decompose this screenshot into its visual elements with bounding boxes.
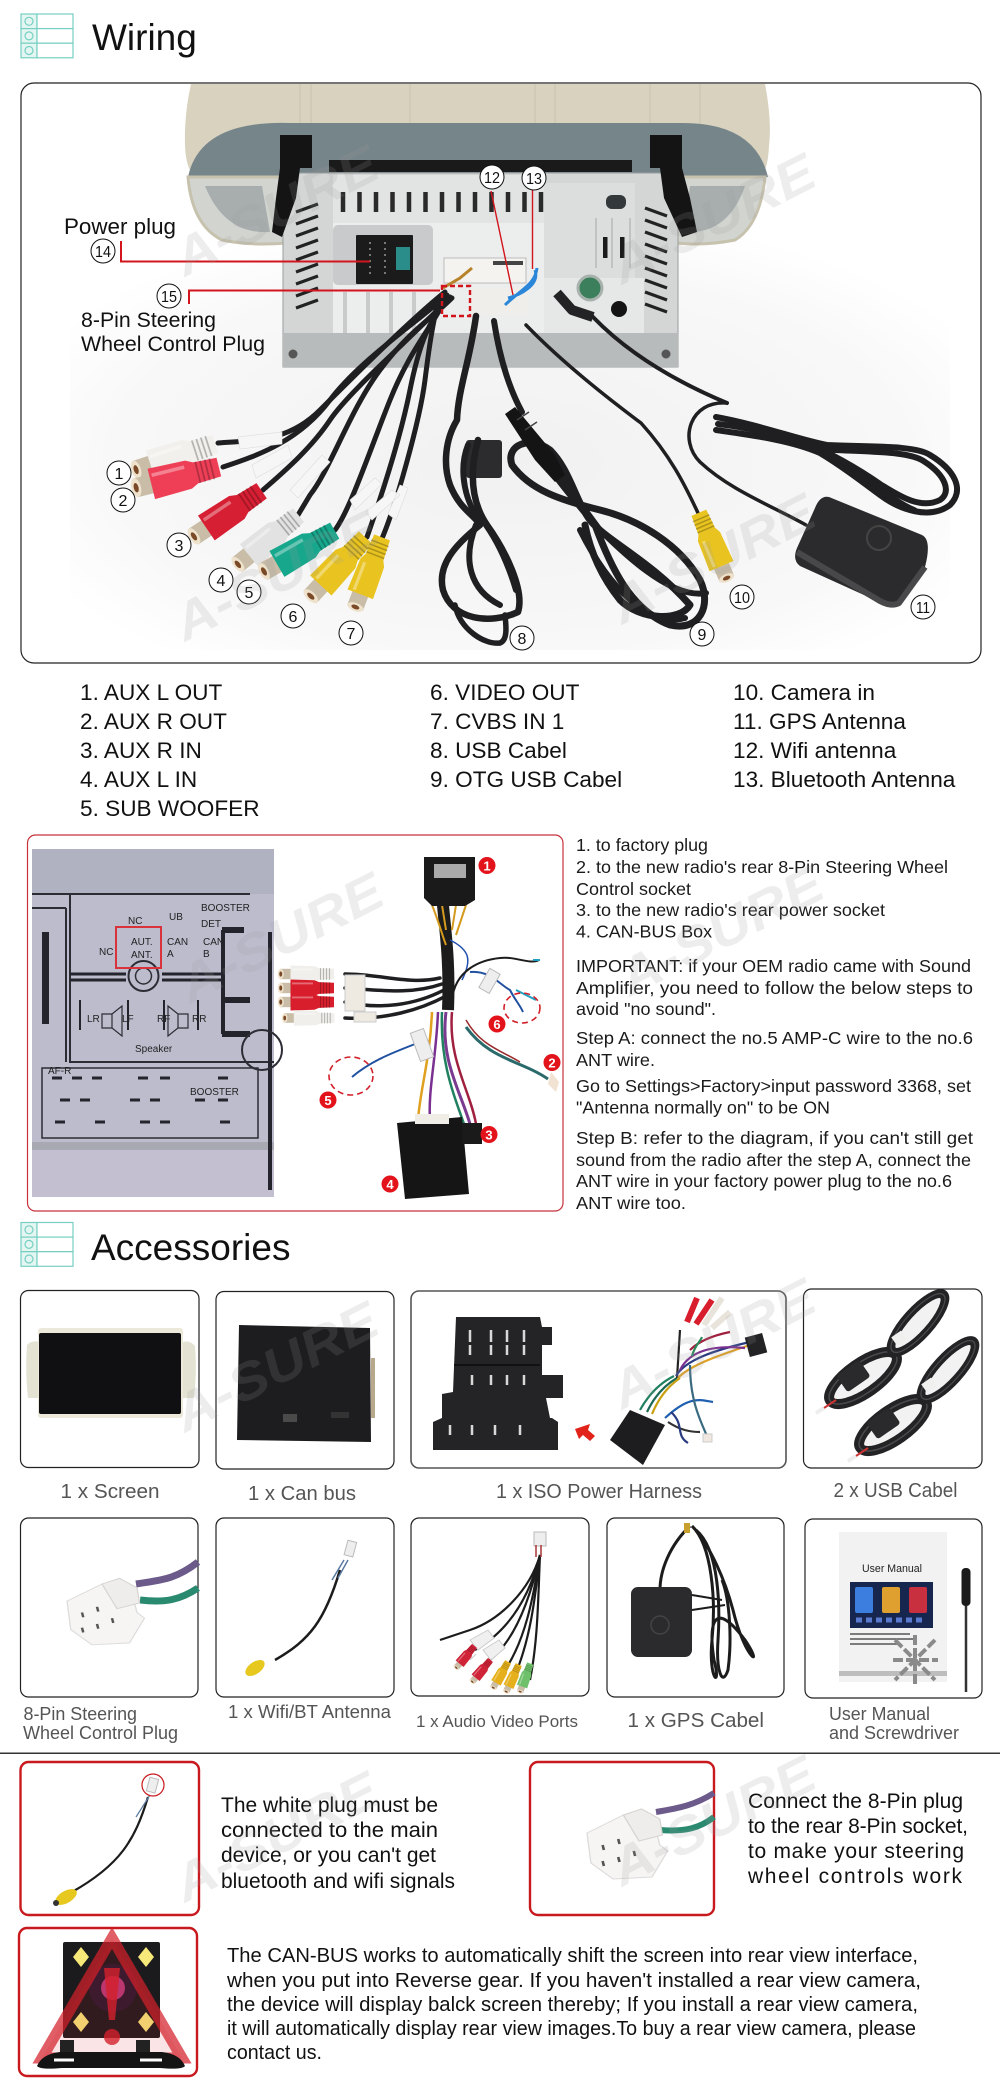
callout: white plug xyxy=(20,1762,199,1915)
accessory: USB cables: 2 x USB Cabel xyxy=(834,1480,958,1502)
accessory: audio video ports: 1 x Audio Video Ports xyxy=(416,1712,578,1731)
accessory: audio video ports xyxy=(411,1518,589,1731)
watermarks: A-SURE xyxy=(162,1761,390,1915)
watermarks: A-SURE xyxy=(162,135,390,289)
accessory: 8-pin steering wheel plug: 8-Pin Steering xyxy=(24,1704,137,1724)
factory socket photo: RR xyxy=(192,1014,206,1025)
numbered badges: 1 xyxy=(483,858,491,874)
numbered badges: 3 xyxy=(485,1128,493,1142)
label: 8-Pin Steering Wheel Control Plug xyxy=(81,308,265,356)
text: harness instructions: Amplifier, you need to follow the below steps to xyxy=(576,978,973,998)
callout: rear camera warning xyxy=(19,1928,197,2076)
panel: CAN-BUS harness diagram xyxy=(28,835,563,1211)
accessory: GPS cable: 1 x GPS Cabel xyxy=(628,1710,764,1732)
numbered badges: 5 xyxy=(324,1093,332,1108)
dashed circles xyxy=(329,993,540,1095)
list: port names: 7. CVBS IN 1 xyxy=(430,709,564,734)
numbered markers: 10 xyxy=(734,590,750,607)
text: white plug note: device, or you can't get xyxy=(221,1844,436,1867)
text: harness instructions: ANT wire. xyxy=(576,1050,655,1070)
accessory: Wifi/BT antenna xyxy=(216,1518,394,1722)
text: harness instructions: 4. CAN-BUS Box xyxy=(576,922,712,942)
heading: Accessories xyxy=(21,1222,290,1268)
cable: OTG USB xyxy=(494,321,706,626)
watermarks: A-SURE xyxy=(599,483,827,637)
panel: wiring photo xyxy=(21,83,981,663)
numbered markers: 11 xyxy=(916,600,930,617)
watermarks: A-SURE xyxy=(607,855,835,1009)
cable: GPS antenna xyxy=(593,317,957,605)
accessory: manual and screwdriver: User Manual xyxy=(862,1563,922,1575)
icon: section marker xyxy=(21,14,73,58)
accessory: 8-pin steering wheel plug xyxy=(20,1518,198,1743)
numbered markers: 9 xyxy=(698,627,707,644)
text: 8-pin plug note: Connect the 8-Pin plug xyxy=(748,1790,963,1813)
watermarks: A-SURE xyxy=(599,1745,827,1899)
text: harness instructions: "Antenna normally on" to be ON xyxy=(576,1098,830,1118)
factory socket photo: BOOSTER xyxy=(201,903,250,914)
numbered markers: 15 xyxy=(161,289,177,306)
text: CAN-BUS rear view note xyxy=(226,1944,921,2064)
list: port names: 2. AUX R OUT xyxy=(80,709,227,734)
text: harness instructions: Control socket xyxy=(576,879,691,899)
list: port names: 10. Camera in xyxy=(733,680,875,705)
text: 8-pin plug note xyxy=(747,1790,968,1888)
watermarks: A-SURE xyxy=(599,1268,827,1422)
text: 8-pin plug note: to the rear 8-Pin socket, xyxy=(748,1815,968,1838)
factory socket photo: CAN xyxy=(203,937,224,948)
wiring harness xyxy=(278,857,559,1199)
numbered badges: 2 xyxy=(548,1056,556,1070)
watermarks: A-SURE xyxy=(599,143,827,297)
factory socket photo: NC xyxy=(128,916,142,927)
numbered markers: 12 xyxy=(484,170,500,187)
factory socket photo: DET xyxy=(201,919,221,930)
list: port names: 6. VIDEO OUT xyxy=(430,680,580,705)
accessory: manual and screwdriver: and Screwdriver xyxy=(829,1723,959,1743)
factory socket photo xyxy=(32,849,282,1197)
watermarks: A-SURE xyxy=(167,862,395,1016)
list: port names: 11. GPS Antenna xyxy=(733,709,906,734)
text: white plug note: bluetooth and wifi signals xyxy=(221,1870,455,1893)
list: port names: 12. Wifi antenna xyxy=(733,738,897,763)
text: harness instructions: 1. to factory plug xyxy=(576,835,708,855)
watermarks xyxy=(162,135,835,1915)
accessory: manual and screwdriver: User Manual xyxy=(829,1704,930,1724)
text: CAN-BUS rear view note: the device will display balck screen thereby; If you install a rear view camera, xyxy=(227,1993,918,2016)
callout lines xyxy=(121,186,532,316)
label: 8-Pin Steering Wheel Control Plug: 8-Pin Steering xyxy=(81,308,216,332)
text: harness instructions: 3. to the new radio's rear power socket xyxy=(576,900,885,920)
accessory: screen: 1 x Screen xyxy=(60,1481,160,1503)
accessory: CAN bus: 1 x Can bus xyxy=(248,1483,356,1505)
list: port names: 13. Bluetooth Antenna xyxy=(733,767,956,792)
factory socket photo: AF-R xyxy=(48,1066,71,1077)
numbered markers: 14 xyxy=(95,244,111,261)
factory socket photo: UB xyxy=(169,912,183,923)
icon: section marker xyxy=(21,1222,73,1266)
accessory: CAN bus xyxy=(216,1292,394,1505)
title: Wiring: Wiring xyxy=(92,17,197,58)
numbered markers: 6 xyxy=(289,609,298,626)
text: harness instructions: ANT wire in your factory power plug to the no.6 xyxy=(576,1171,952,1191)
soft backdrop xyxy=(70,230,950,650)
numbered markers: 3 xyxy=(175,538,184,555)
accessory: GPS cable xyxy=(607,1518,784,1732)
numbered markers: 5 xyxy=(245,585,254,602)
head unit rear xyxy=(185,84,770,367)
text: white plug note: connected to the main xyxy=(221,1819,438,1842)
watermarks: A-SURE xyxy=(162,500,390,654)
accessory: manual and screwdriver xyxy=(805,1519,982,1743)
accessory: 8-pin steering wheel plug: Wheel Control Plug xyxy=(23,1723,178,1743)
label: 8-Pin Steering Wheel Control Plug: Wheel Control Plug xyxy=(81,332,265,356)
numbered markers xyxy=(91,165,935,650)
text: harness instructions: sound from the radio after the step A, connect the xyxy=(576,1150,971,1170)
factory socket photo: BOOSTER xyxy=(190,1087,239,1098)
text: CAN-BUS rear view note: The CAN-BUS works to automatically shift the screen into rear view interface, xyxy=(227,1944,918,1967)
divider xyxy=(0,1752,1000,1754)
accessory: Wifi/BT antenna: 1 x Wifi/BT Antenna xyxy=(228,1702,392,1722)
list: port names: 1. AUX L OUT xyxy=(80,680,223,705)
factory socket photo: B xyxy=(203,949,210,960)
text: harness instructions: Step A: connect the no.5 AMP-C wire to the no.6 xyxy=(576,1028,973,1048)
factory socket photo: LF xyxy=(122,1014,134,1025)
numbered badges xyxy=(320,857,560,1192)
text: 8-pin plug note: to make your steering xyxy=(748,1840,964,1863)
label: Power plug: Power plug xyxy=(64,214,176,239)
text: CAN-BUS rear view note: it will automatically display rear view images.To buy a rear view camera, please xyxy=(227,2017,916,2040)
factory socket photo: NC xyxy=(99,947,113,958)
text: harness instructions: IMPORTANT: if your OEM radio came with Sound xyxy=(576,956,971,976)
text: 8-pin plug note: wheel controls work xyxy=(747,1865,962,1888)
list: port names: 9. OTG USB Cabel xyxy=(430,767,622,792)
list: port names: 3. AUX R IN xyxy=(80,738,202,763)
numbered markers: 2 xyxy=(119,493,128,510)
list: port names xyxy=(80,680,956,821)
accessory: ISO power harness xyxy=(411,1291,786,1503)
watermarks: A-SURE xyxy=(162,1291,390,1445)
accessory: ISO power harness: 1 x ISO Power Harness xyxy=(496,1481,702,1503)
cables: audio and video bundle xyxy=(127,292,452,616)
numbered markers: 7 xyxy=(347,626,356,643)
text: CAN-BUS rear view note: when you put into Reverse gear. If you haven't installed a rear view camera, xyxy=(226,1969,921,1992)
callout: 8-pin plug xyxy=(530,1762,714,1915)
heading: Wiring xyxy=(21,14,197,58)
factory socket photo: CAN xyxy=(167,937,188,948)
title: Accessories: Accessories xyxy=(91,1227,290,1268)
text: harness instructions: Go to Settings>Factory>input password 3368, set xyxy=(576,1076,971,1096)
numbered badges: 6 xyxy=(493,1017,501,1032)
cable: camera in xyxy=(526,325,740,587)
numbered badges: 4 xyxy=(386,1177,394,1192)
accessory: screen xyxy=(20,1290,199,1503)
text: white plug note xyxy=(221,1794,455,1893)
list: port names: 5. SUB WOOFER xyxy=(80,796,260,821)
text: harness instructions: 2. to the new radio's rear 8-Pin Steering Wheel xyxy=(576,857,948,877)
numbered markers: 4 xyxy=(217,573,226,590)
factory socket photo: AUT. xyxy=(131,937,153,948)
accessory: USB cables xyxy=(804,1287,982,1502)
text: harness instructions xyxy=(576,835,973,1213)
list: port names: 4. AUX L IN xyxy=(80,767,197,792)
factory socket photo: RF xyxy=(157,1014,170,1025)
text: harness instructions: ANT wire too. xyxy=(576,1193,686,1213)
numbered markers: 8 xyxy=(518,631,527,648)
cable: USB xyxy=(442,316,519,643)
text: white plug note: The white plug must be xyxy=(221,1794,438,1817)
factory socket photo: A xyxy=(167,949,174,960)
text: harness instructions: Step B: refer to the diagram, if you can't still get xyxy=(576,1128,973,1148)
list: port names: 8. USB Cabel xyxy=(430,738,567,763)
numbered markers: 1 xyxy=(115,466,124,483)
numbered markers: 13 xyxy=(526,171,542,188)
factory socket photo: Speaker xyxy=(135,1044,173,1055)
text: CAN-BUS rear view note: contact us. xyxy=(227,2041,322,2064)
factory socket photo: ANT. xyxy=(131,950,153,961)
factory socket photo: LR xyxy=(87,1014,100,1025)
text: harness instructions: avoid "no sound". xyxy=(576,999,716,1019)
